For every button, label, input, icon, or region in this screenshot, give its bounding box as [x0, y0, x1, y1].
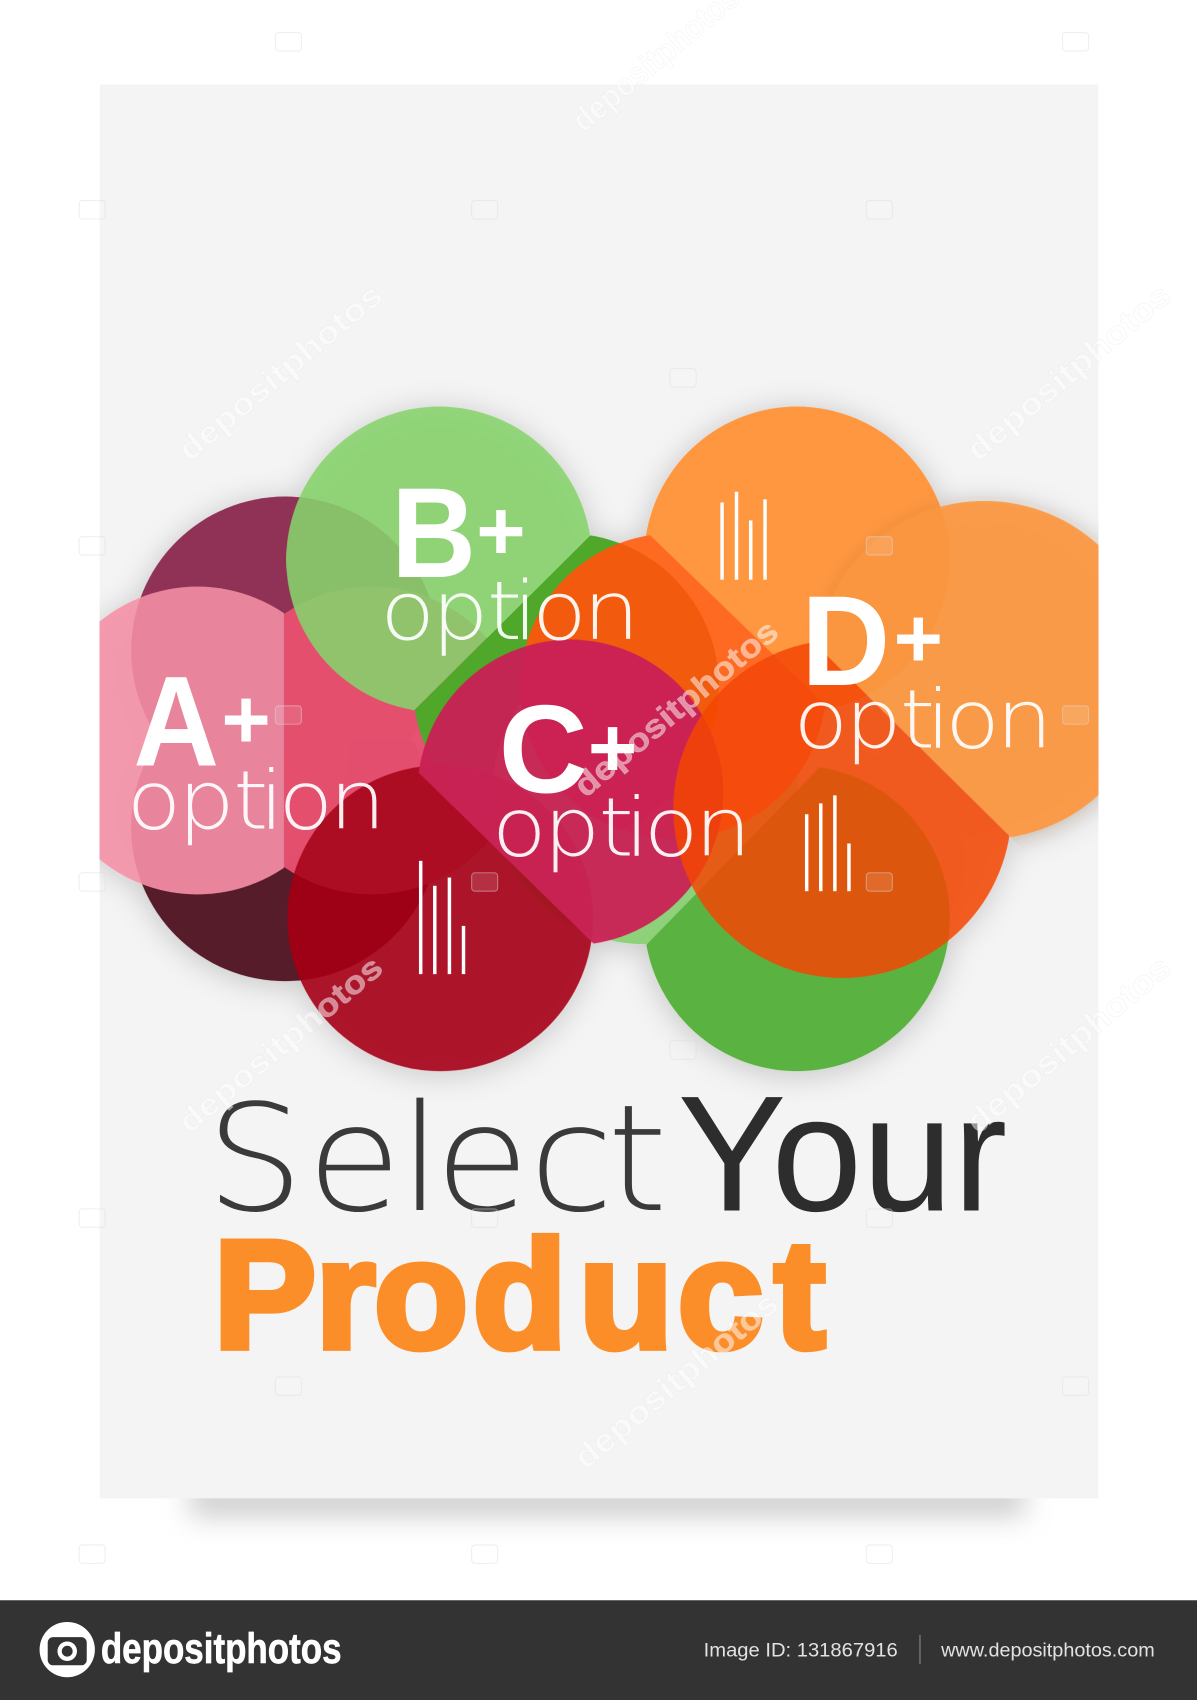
brand name: depositphotos — [101, 1625, 342, 1672]
circles group — [43, 407, 1154, 1071]
label: B+ option — [387, 488, 630, 656]
circle: maroon upper — [131, 486, 430, 740]
title: Select Your Product — [206, 1061, 1007, 1381]
word: option B: option — [380, 565, 640, 659]
watermarks: camera marks — [79, 33, 1089, 1563]
grade C+ — [504, 704, 634, 794]
watermarks: depositphotos: depositphotos — [959, 949, 1178, 1140]
card shadow — [190, 1483, 1025, 1516]
word: option D: option — [793, 674, 1053, 767]
grade C+: C — [499, 679, 588, 820]
circle: maroon lower — [140, 867, 428, 998]
grade D+: D — [801, 570, 890, 713]
footer bar — [0, 1600, 1197, 1700]
overlap: maroon tone under pink — [142, 740, 285, 894]
grade B+: + — [476, 482, 526, 577]
circle: orange-red lower — [673, 640, 1012, 978]
circle: crimson lower — [287, 765, 593, 1071]
circle: red-orange upper — [520, 533, 826, 839]
circle: crimson C — [417, 640, 723, 945]
divider — [919, 1635, 921, 1664]
circle: green lower — [644, 765, 950, 1071]
label: C+ option — [498, 704, 742, 872]
label: A+ option — [134, 677, 376, 846]
grade D+: + — [894, 590, 943, 685]
grade D+ — [809, 596, 940, 685]
label: D+ option — [800, 596, 1044, 764]
heading word: Your: Your — [678, 1061, 1007, 1245]
grade B+ — [399, 488, 522, 577]
panel: brochure card — [100, 85, 1098, 1498]
circle: pink left half — [100, 586, 284, 895]
heading word: Select: Select — [206, 1073, 668, 1245]
circle: pink right half — [284, 587, 488, 894]
grade B+: B — [391, 462, 476, 605]
grade A+ — [136, 677, 268, 766]
icon: bars in crimson circle — [419, 861, 465, 974]
icon: bars in top orange — [720, 492, 767, 580]
icon: depositphotos logo — [40, 1622, 95, 1677]
circle: dark green upper — [414, 531, 620, 746]
image id: Image ID: 131867916 — [704, 1640, 898, 1662]
grade A+: A — [133, 650, 219, 793]
circle: orange right — [830, 490, 1098, 852]
circle: light green lower — [511, 776, 798, 956]
website: www.depositphotos.com — [940, 1640, 1155, 1662]
watermarks: depositphotos: depositphotos — [171, 276, 389, 468]
watermarks: depositphotos — [171, 0, 1178, 1476]
circle: green B — [286, 407, 592, 712]
circle: orange top — [644, 407, 950, 712]
watermarks: depositphotos: depositphotos — [959, 276, 1178, 468]
word: option C: option — [492, 782, 751, 875]
icon: bars in lower orange — [805, 795, 851, 891]
grade A+: + — [221, 671, 271, 766]
word: option A: option — [126, 755, 386, 848]
grade C+: + — [588, 699, 637, 794]
footer background — [0, 1600, 1197, 1700]
watermarks: depositphotos: depositphotos — [567, 1285, 785, 1476]
overlap: red-orange over green — [526, 543, 719, 732]
heading word: Product: Product — [214, 1209, 825, 1381]
watermarks: depositphotos: depositphotos — [171, 949, 389, 1140]
circle cluster — [43, 407, 1154, 1071]
watermarks: depositphotos: depositphotos — [567, 613, 785, 804]
